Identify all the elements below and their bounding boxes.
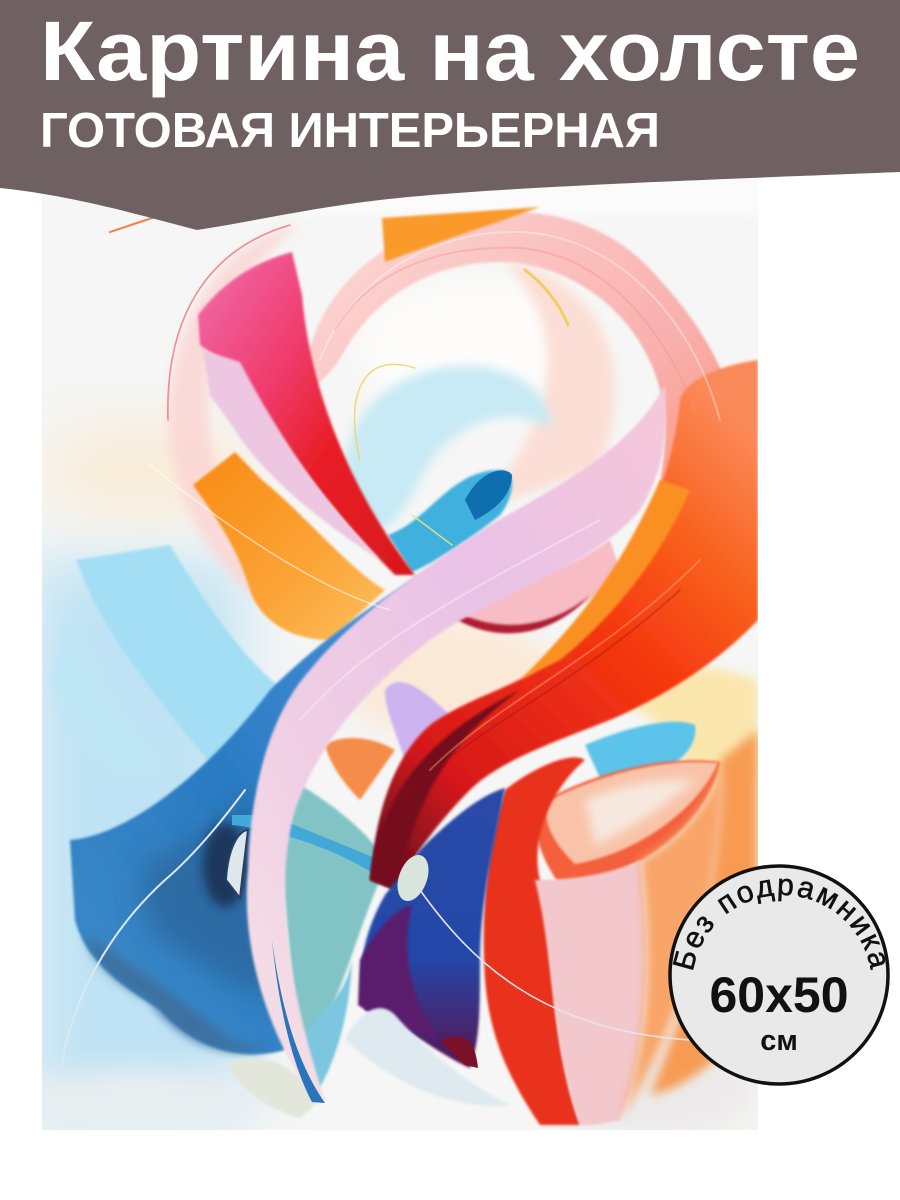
light blue left stroke	[76, 544, 277, 760]
big orange-red right sweep	[370, 360, 758, 890]
badge unit: см	[760, 1025, 798, 1057]
badge circle	[670, 866, 888, 1084]
light blue swirl centre	[345, 366, 550, 531]
lower ring pink and dark red	[412, 540, 620, 625]
painting: abstract brush strokes	[10, 175, 760, 1140]
ribbon: pink circular swirl	[310, 212, 722, 484]
sky blue right patch	[585, 722, 695, 778]
blue left fan	[70, 575, 420, 1054]
pale top-left pink arc	[166, 226, 293, 597]
pale yellow	[630, 663, 758, 782]
red lower stroke	[484, 757, 585, 1125]
fine scratches	[60, 217, 720, 1075]
lavender patch	[384, 681, 448, 758]
background washes	[42, 356, 748, 1130]
orange left stroke	[193, 452, 385, 640]
orange top stroke	[382, 207, 540, 262]
orange patch	[325, 738, 395, 800]
title: Картина на холсте	[40, 4, 860, 98]
badge size: 60x50	[709, 967, 849, 1023]
right orange lower	[650, 730, 758, 1095]
teal lower panel	[284, 786, 380, 1034]
subtitle: ГОТОВАЯ ИНТЕРЬЕРНАЯ	[40, 104, 660, 158]
header banner	[0, 0, 900, 230]
white-blue lower stroke	[345, 1008, 510, 1106]
size badge	[668, 864, 890, 1086]
badge curved text: Без подрамника	[672, 878, 886, 970]
magenta-red stroke	[198, 252, 415, 575]
navy purple stroke	[361, 788, 505, 1068]
pale pink lower	[535, 860, 646, 1125]
lilac main stroke	[247, 385, 666, 1100]
